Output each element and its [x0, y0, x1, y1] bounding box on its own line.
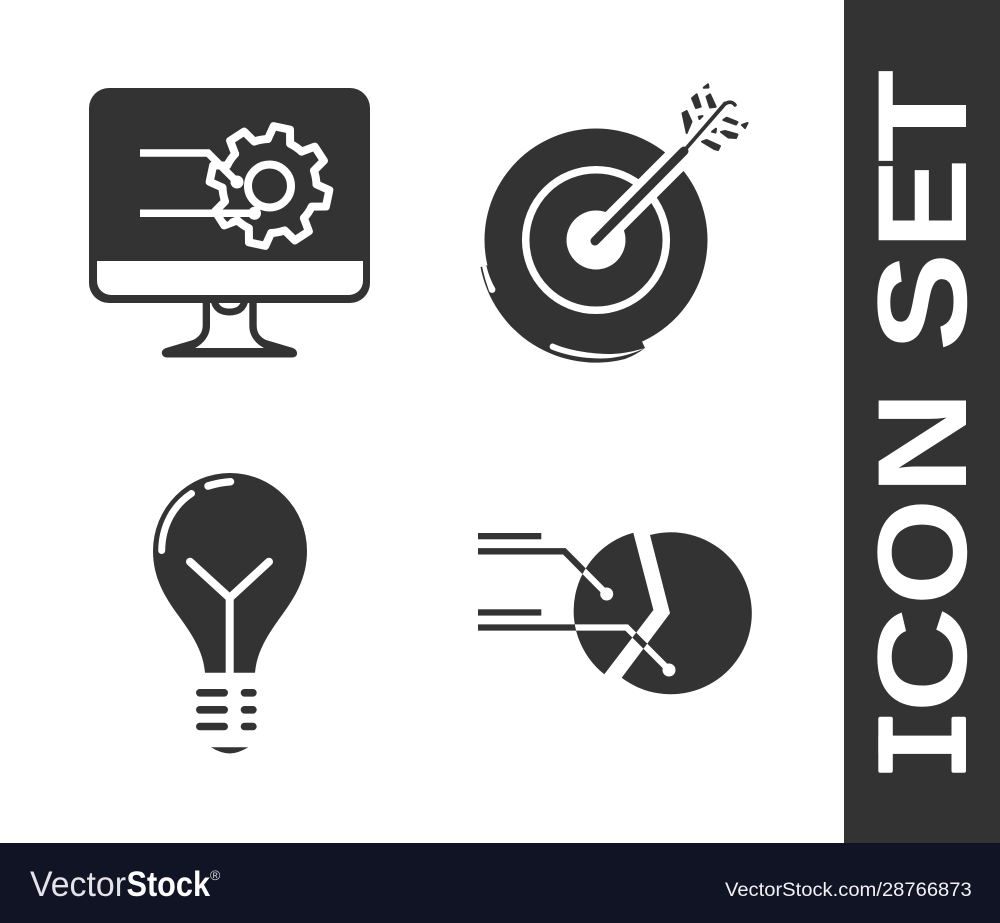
circuit line: upper: [140, 153, 244, 188]
arrow clearance band: [598, 144, 692, 238]
target bottom highlight: [550, 343, 645, 358]
gear outline: [199, 116, 340, 256]
target bullseye: [566, 210, 626, 270]
bulb glass: [153, 473, 307, 673]
gear centre ring: [248, 164, 291, 208]
arrow fletching: [682, 84, 748, 150]
banner title: N: [851, 391, 993, 495]
bulb tip: [211, 747, 248, 754]
monitor body: [89, 88, 370, 303]
screw base threads: [196, 689, 257, 730]
banner title: O: [852, 499, 994, 605]
icon: target with arrow: [480, 84, 748, 363]
icon: pie chart with leader lines: [478, 532, 752, 694]
banner title: S: [852, 252, 994, 352]
icon: computer monitor with gear: [89, 88, 370, 358]
legend bars: [478, 533, 541, 616]
panel: icon set banner: [844, 0, 1000, 843]
filament: [190, 562, 269, 674]
icon: light bulb: [153, 473, 307, 754]
target ring: [526, 170, 666, 310]
glass highlights: [162, 482, 230, 550]
pie slices: [574, 532, 752, 694]
footer bar: [0, 843, 1000, 923]
footer logo: ®: [210, 867, 221, 883]
leader lines inside the pie: [574, 568, 676, 676]
banner title: E: [852, 158, 994, 249]
circuit line: lower: [140, 207, 261, 222]
target disc: [484, 128, 708, 352]
target left highlight: [482, 266, 495, 293]
banner title: I: [851, 727, 993, 762]
target outer crescent: [480, 240, 645, 363]
footer logo: [30, 865, 221, 904]
monitor lower bezel: [97, 261, 363, 295]
banner title: C: [852, 607, 994, 713]
banner title: T: [851, 69, 993, 163]
footer image id: VectorStock.com/28766873: [725, 879, 972, 901]
leader lines outside the pie: [478, 551, 669, 670]
footer logo: Stock: [126, 865, 210, 904]
arrow shaft: [595, 102, 735, 241]
monitor stand: [162, 300, 297, 358]
banner title: [851, 69, 994, 773]
footer logo: Vector: [30, 865, 126, 904]
